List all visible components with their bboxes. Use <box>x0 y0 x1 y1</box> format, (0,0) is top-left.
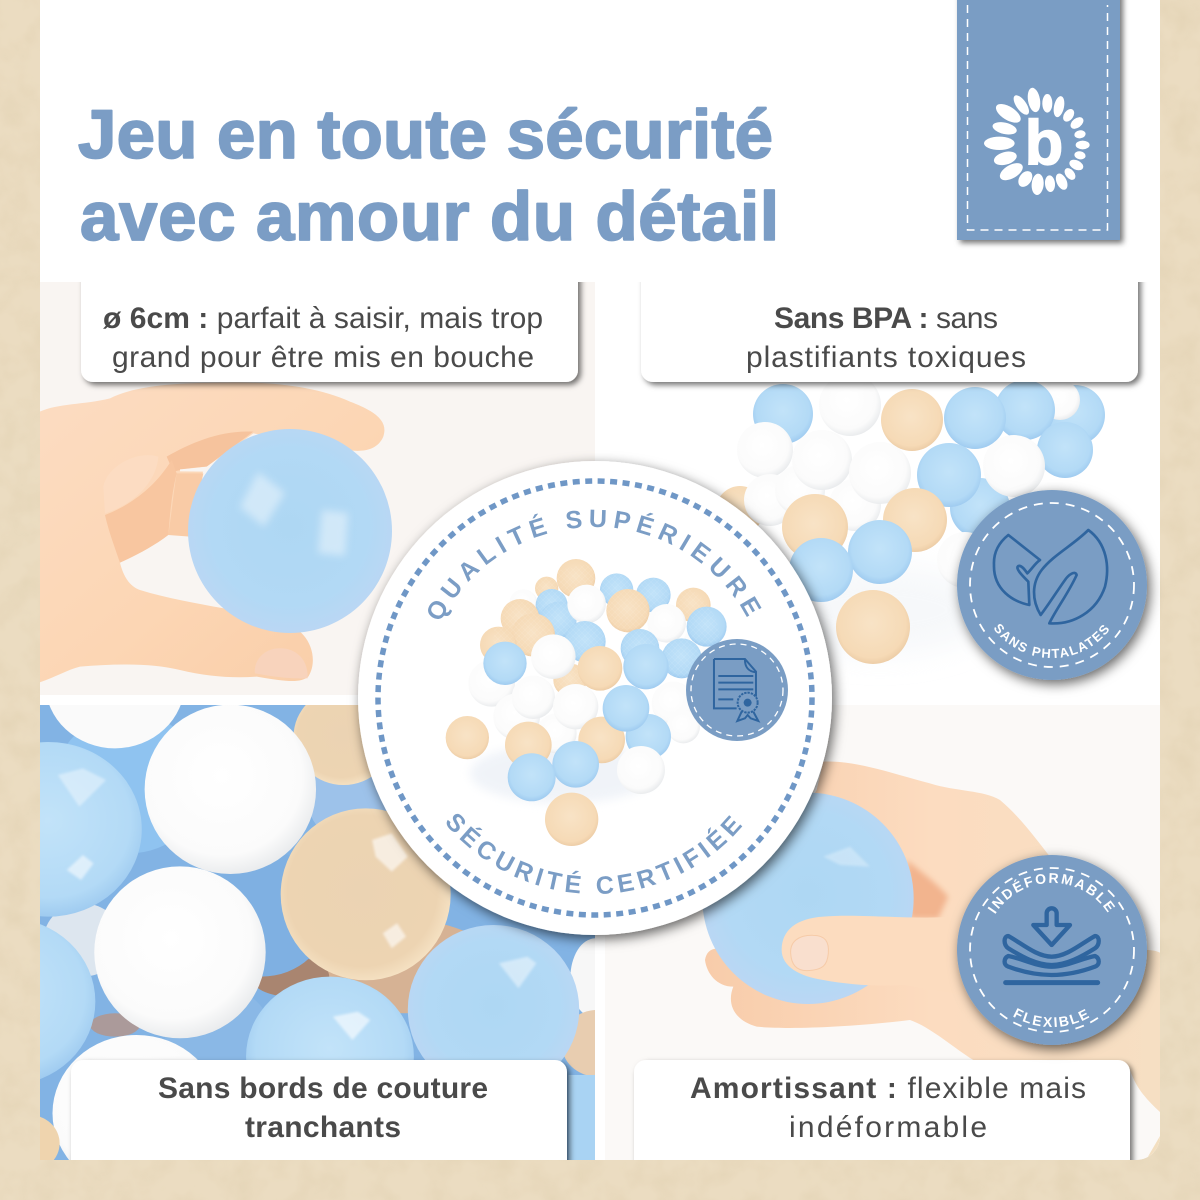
logo label <box>957 0 1120 240</box>
photo: hand <box>37 383 384 683</box>
text box: diameter: grand pour être mis en bouche <box>112 341 534 374</box>
photo: balls close-up <box>40 705 595 1160</box>
text box: cushioning: indéformable <box>789 1111 987 1144</box>
badge: indéformable flexible: INDÉFORMABLE <box>988 873 1116 914</box>
badge: indéformable flexible: FLEXIBLE <box>1013 1008 1090 1027</box>
text box: seams: Sans bords de couture <box>158 1072 488 1105</box>
title: Jeu en toute sécurité <box>78 96 773 173</box>
central seal <box>352 456 844 948</box>
badge: indéformable flexible <box>951 850 1159 1058</box>
panel: top-right photo, balls in net <box>720 382 1105 664</box>
panel: bottom-right photo, hand squeezing ball <box>703 762 1160 1160</box>
icon: flower logo: b <box>1025 108 1063 178</box>
photo: ball net pile <box>716 374 1105 664</box>
icon: compressed layers with arrow <box>1005 908 1099 983</box>
photo: pile of balls <box>446 559 727 846</box>
icon: certificate <box>714 659 758 721</box>
text box: seams: tranchants <box>245 1111 401 1144</box>
text box: diameter <box>81 272 578 382</box>
badge: certificate <box>686 639 788 741</box>
text box: diameter: ø 6cm : parfait à saisir, mais trop <box>103 302 543 335</box>
photo: hand <box>702 762 1163 1115</box>
text box: BPA <box>641 272 1138 382</box>
seal heading: top: QUALITÉ SUPÉRIEURE <box>428 510 762 619</box>
seal heading: bottom: SÉCURITÉ CERTIFIÉE <box>446 814 742 894</box>
text box: cushioning <box>632 1058 1138 1160</box>
badge: sans phtalates <box>951 485 1159 693</box>
icon: leaves <box>994 530 1107 623</box>
text box: BPA: plastifiants toxiques <box>746 341 1026 374</box>
text box: BPA: Sans BPA : sans <box>774 302 998 335</box>
panel: top-left photo, hand holding ball <box>37 282 595 695</box>
panel: bottom-left photo, ball close-up <box>40 705 595 1160</box>
icon: flower logo <box>984 87 1090 195</box>
icon part: thumb <box>782 916 941 986</box>
photo: blue ball <box>188 429 392 633</box>
text box: cushioning: Amortissant : flexible mais <box>690 1072 1086 1105</box>
badge: sans phtalates: SANS PHTALATES <box>994 624 1109 658</box>
title <box>78 96 779 255</box>
title: avec amour du détail <box>80 178 779 255</box>
text box: seams <box>70 1058 574 1160</box>
